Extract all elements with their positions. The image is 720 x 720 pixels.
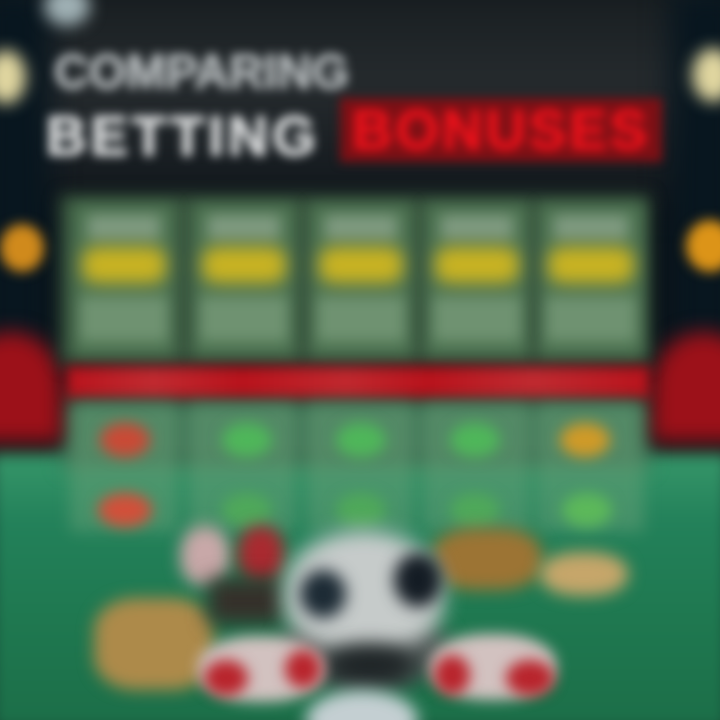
green pitch floor (0, 452, 720, 720)
green marker row 2 col 2 (222, 493, 272, 527)
comparison table (62, 394, 652, 540)
football patch left (300, 570, 346, 618)
football patch bottom (325, 645, 415, 685)
highlighted title word: BONUSES (352, 98, 650, 161)
left dark side (0, 0, 50, 390)
cream chip right (540, 552, 628, 596)
red edge right chip (434, 655, 470, 695)
title line 1: COMPARING (54, 46, 349, 99)
title (40, 46, 668, 168)
dark chip shadow (208, 578, 284, 624)
offer cards (68, 198, 650, 360)
red marker row 2 (98, 493, 152, 527)
football patch right (394, 553, 442, 607)
green marker row 2 col 5 (562, 493, 612, 527)
football shadow (280, 610, 450, 690)
right floodlight (692, 48, 720, 102)
green marker row 1 col 4 (450, 423, 500, 457)
card 5 (540, 205, 642, 355)
card 4 (427, 205, 527, 355)
green marker row 1 col 3 (336, 423, 386, 457)
column 5 (536, 402, 644, 532)
white chip top left (180, 526, 230, 586)
red marker row 1 (100, 423, 150, 457)
red edge left chip right side (285, 650, 321, 688)
red chip top left (238, 526, 284, 582)
gold chip stack left (94, 598, 214, 690)
right dark side (670, 0, 720, 390)
table backdrop (64, 398, 648, 468)
stadium background (0, 0, 720, 210)
column 3 (306, 402, 414, 532)
top-left light (44, 0, 90, 26)
card 3 (311, 205, 411, 355)
right orange lamp (686, 220, 720, 272)
column 4 (422, 402, 530, 532)
orange marker row 1 col 5 (560, 423, 610, 457)
gold chip stack right (432, 528, 542, 590)
title line 2: BETTING (46, 104, 320, 167)
red edge left chip (204, 660, 248, 696)
green marker row 2 col 3 (336, 493, 386, 527)
card 1 (74, 205, 174, 355)
football (284, 530, 444, 650)
card 2 (194, 205, 294, 355)
panel: offers backdrop (60, 195, 650, 365)
left floodlight (0, 50, 26, 104)
green marker row 1 col 2 (222, 423, 272, 457)
red edge right chip right side (506, 660, 554, 696)
ball below (306, 690, 418, 720)
left orange lamp (0, 224, 44, 272)
red header band (66, 366, 650, 398)
left red curtain (0, 332, 62, 442)
red white chip right (430, 634, 556, 700)
column 1 (70, 402, 178, 532)
red white chip left (198, 636, 324, 702)
green marker row 2 col 4 (450, 493, 500, 527)
column 2 (188, 402, 296, 532)
right red curtain (652, 332, 720, 442)
